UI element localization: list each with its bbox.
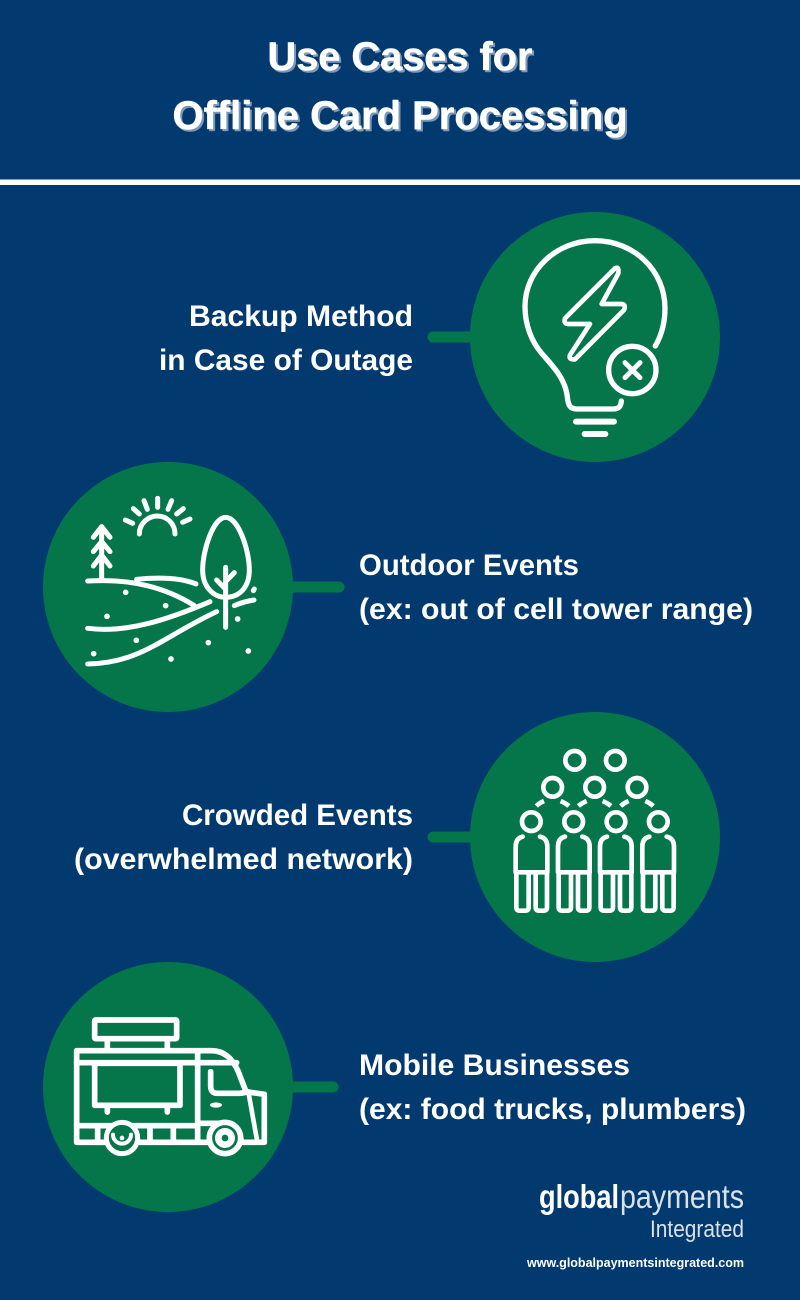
label: outdoor events: Outdoor Events (359, 549, 579, 582)
connector: backup method (433, 332, 480, 342)
panel: backup method (159, 212, 720, 462)
label: crowded events: (overwhelmed network) (74, 843, 413, 876)
green circle: crowded events (470, 712, 720, 962)
connector: mobile businesses (280, 1082, 333, 1092)
title: Use Cases for (268, 35, 532, 79)
label: crowded events: Crowded Events (182, 799, 413, 832)
green circle: mobile businesses (43, 962, 293, 1212)
icon: landscape with sun and trees (88, 498, 254, 664)
label: outdoor events: (ex: out of cell tower range) (359, 593, 753, 626)
label: crowded events (74, 799, 413, 876)
green circle: backup method (470, 212, 720, 462)
label: mobile businesses (359, 1049, 746, 1126)
panel: crowded events (74, 712, 720, 962)
label: backup method: in Case of Outage (159, 344, 413, 377)
logo: global payments integrated: global (539, 1178, 619, 1215)
label: backup method: Backup Method (189, 300, 413, 333)
logo: global payments integrated: Integrated (650, 1216, 744, 1243)
label: backup method (159, 300, 413, 377)
website url: www.globalpaymentsintegrated.com (526, 1256, 744, 1270)
panel: mobile businesses (43, 962, 746, 1212)
logo: global payments integrated (539, 1178, 744, 1243)
green circle: outdoor events (43, 462, 293, 712)
logo: global payments integrated: payments (620, 1178, 744, 1215)
icon: food truck (77, 1020, 264, 1154)
panel: outdoor events (43, 462, 753, 712)
title (172, 35, 628, 138)
label: mobile businesses: (ex: food trucks, plumbers) (359, 1093, 746, 1126)
icon: light bulb with lightning bolt and x (525, 241, 665, 434)
label: outdoor events (359, 549, 753, 626)
title: Offline Card Processing (172, 94, 628, 138)
icon: crowd of people (516, 751, 674, 911)
label: mobile businesses: Mobile Businesses (359, 1049, 630, 1082)
connector: outdoor events (280, 582, 339, 592)
connector: crowded events (433, 832, 480, 842)
